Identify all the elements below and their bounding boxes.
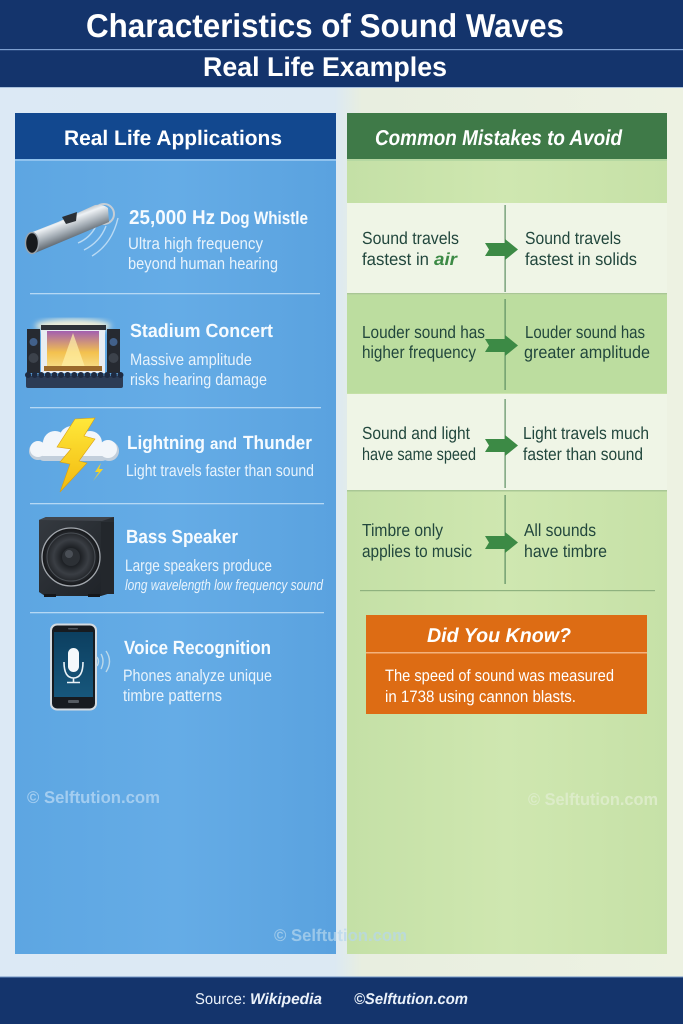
- heading: common mistakes to avoid: Common Mistakes to Avoid: [375, 126, 623, 150]
- row: loudness vs amplitude: higher frequency: [362, 342, 476, 362]
- icon: bass speaker: [39, 517, 114, 597]
- panel: real life applications: [15, 113, 336, 954]
- text: voice recognition: Phones analyze unique: [123, 667, 272, 685]
- site credit: ©Selftution.com: [354, 991, 468, 1008]
- row: loudness vs amplitude: [347, 295, 667, 393]
- text: lightning and thunder: and: [210, 436, 237, 453]
- row: air vs solids: [347, 203, 667, 294]
- text: bass speaker: long wavelength low frequency sound: [125, 577, 324, 594]
- text: bass speaker: [125, 527, 324, 594]
- callout: did you know: [366, 615, 647, 714]
- text: stadium concert: [130, 321, 274, 389]
- watermark: © Selftution.com: [528, 790, 658, 809]
- source credit: Wikipedia: [250, 991, 322, 1008]
- icon: dog whistle: [26, 204, 118, 256]
- text: stadium concert: risks hearing damage: [130, 371, 267, 389]
- title banner: [0, 0, 683, 88]
- callout body: [385, 667, 614, 706]
- text: voice recognition: timbre patterns: [123, 687, 222, 705]
- text: dog whistle: beyond human hearing: [128, 255, 278, 273]
- text: bass speaker: Large speakers produce: [125, 557, 272, 575]
- row: sound and light speed: Sound and light: [362, 423, 470, 443]
- text: dog whistle: 25,000 Hz: [129, 207, 215, 229]
- footer: [0, 976, 683, 1024]
- row: timbre: applies to music: [362, 541, 472, 561]
- row: air vs solids: air: [434, 249, 458, 269]
- row: air vs solids: fastest in: [362, 249, 429, 269]
- row: sound and light speed: faster than sound: [523, 444, 643, 464]
- callout heading: Did You Know?: [427, 625, 571, 647]
- icon: voice recognition phone: [51, 624, 110, 710]
- text: dog whistle: [128, 207, 308, 273]
- text: lightning and thunder: Light travels faster than sound: [126, 462, 314, 480]
- watermark: © Selftution.com: [274, 926, 407, 945]
- text: bass speaker: Bass Speaker: [126, 527, 239, 548]
- heading: real life applications: Real Life Applications: [64, 127, 282, 150]
- text: dog whistle: Ultra high frequency: [128, 235, 264, 253]
- row: timbre: [362, 495, 607, 584]
- row: air vs solids: Sound travels: [525, 228, 621, 248]
- row: loudness vs amplitude: greater amplitude: [524, 342, 650, 362]
- source credit: Source:: [195, 991, 246, 1008]
- row: timbre: All sounds: [524, 520, 596, 540]
- row: air vs solids: fastest in solids: [525, 249, 637, 269]
- row: sound and light speed: [347, 394, 667, 492]
- source credit: [195, 991, 322, 1008]
- callout body: The speed of sound was measured: [385, 667, 614, 685]
- row: timbre: have timbre: [524, 541, 607, 561]
- row: sound and light speed: have same speed: [362, 444, 476, 464]
- text: lightning and thunder: [126, 433, 314, 480]
- text: lightning and thunder: Thunder: [243, 433, 313, 454]
- text: stadium concert: Massive amplitude: [130, 351, 252, 369]
- callout body: in 1738 using cannon blasts.: [385, 688, 576, 706]
- row: air vs solids: Sound travels: [362, 228, 459, 248]
- text: voice recognition: [123, 638, 272, 705]
- text: dog whistle: Dog Whistle: [220, 208, 308, 228]
- icon: stadium concert: [26, 319, 123, 388]
- row: loudness vs amplitude: Louder sound has: [525, 322, 645, 342]
- text: lightning and thunder: Lightning: [127, 433, 205, 454]
- row: sound and light speed: Light travels much: [523, 423, 649, 443]
- watermark: © Selftution.com: [27, 788, 160, 807]
- row: loudness vs amplitude: Louder sound has: [362, 322, 485, 342]
- title: Characteristics of Sound Waves: [86, 7, 564, 44]
- icon: lightning and thunder: [29, 418, 119, 492]
- row: timbre: Timbre only: [362, 520, 443, 540]
- subtitle: Real Life Examples: [203, 52, 447, 82]
- text: stadium concert: Stadium Concert: [130, 321, 274, 342]
- text: voice recognition: Voice Recognition: [124, 638, 271, 659]
- panel: common mistakes to avoid: [347, 113, 667, 954]
